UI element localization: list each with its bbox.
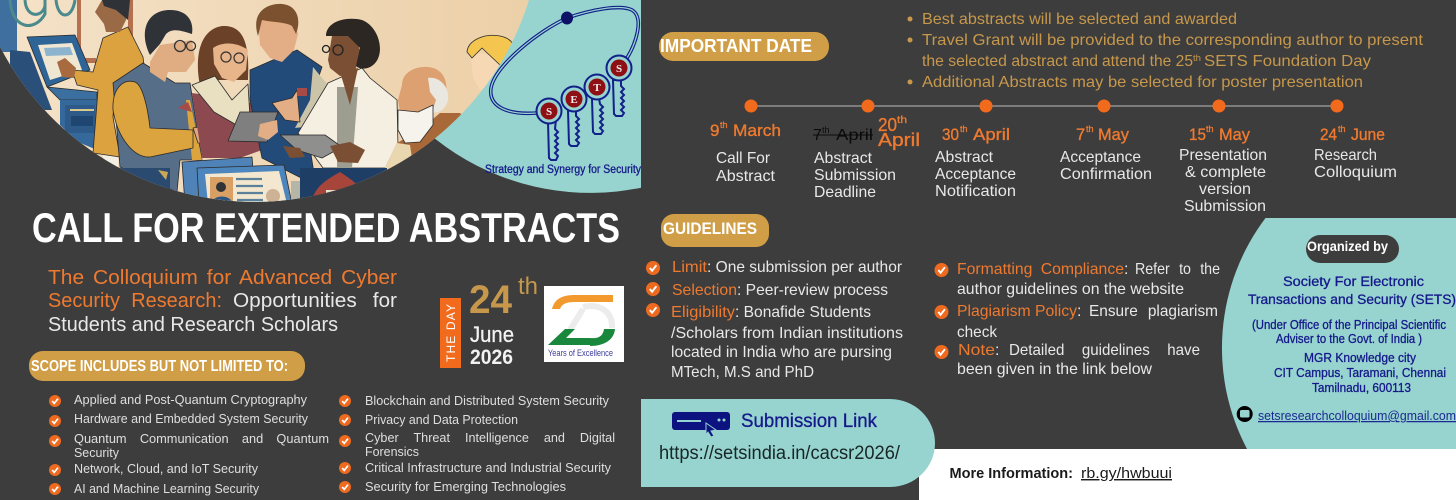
- milestone: revised deadline 20th April: Deadline: [814, 184, 876, 201]
- milestone: revised deadline 20th April: April: [836, 127, 873, 144]
- guidelines: left column: located in India who are pursing: [671, 344, 892, 361]
- guidelines: left column: [646, 259, 903, 381]
- award notes: th: [1193, 53, 1201, 63]
- milestone: 15th May: th: [1206, 124, 1214, 134]
- illustration: group of researchers: [0, 0, 530, 204]
- milestone: 15th May: & complete: [1185, 164, 1266, 181]
- event date block: June: [470, 322, 514, 347]
- more information line: More Information:: [950, 466, 1073, 482]
- milestone: revised deadline 20th April: Submission: [814, 167, 896, 184]
- scope list: left column: AI and Machine Learning Security: [74, 481, 259, 496]
- milestone: 15th May: Submission: [1184, 198, 1266, 215]
- organizer address: CIT Campus, Taramani, Chennai: [1274, 366, 1446, 380]
- timeline: [744, 100, 1344, 112]
- email address: setsresearchcolloquium@gmail.com: [1258, 409, 1456, 423]
- milestone: 30th April: [935, 124, 1016, 200]
- milestone: 24th June: June: [1351, 126, 1385, 144]
- guidelines: left column: /Scholars from Indian institutions: [671, 325, 903, 342]
- milestone: 15th May: version: [1199, 181, 1251, 198]
- guidelines pill: [661, 214, 769, 247]
- scope list: right column: [339, 393, 615, 494]
- scope list: right column: Blockchain and Distributed System Security: [365, 393, 609, 408]
- award notes: Additional Abstracts may be selected for poster presentation: [922, 74, 1363, 91]
- milestone: 30th April: Notification: [935, 183, 1016, 200]
- submission url: https://setsindia.in/cacsr2026/: [659, 443, 901, 464]
- award notes: SETS Foundation Day: [1204, 53, 1371, 70]
- milestone: 30th April: Abstract: [935, 149, 994, 166]
- scope list: right column: Critical Infrastructure and Industrial Security: [365, 460, 611, 475]
- guidelines: right column: Ensure plagiarism: [1089, 303, 1218, 320]
- organizer address: Tamilnadu, 600113: [1312, 381, 1411, 395]
- award notes: the selected abstract and: [922, 53, 1098, 70]
- woman in white coat: [280, 19, 398, 168]
- organizer name: [1248, 274, 1456, 307]
- guidelines: left column: Eligibility: [671, 304, 735, 321]
- milestone: 9th March: Abstract: [716, 168, 776, 185]
- scope list: left column: Security: [74, 445, 119, 460]
- milestone: 15th May: May: [1219, 126, 1251, 144]
- scope list: left column: Hardware and Embedded System Security: [74, 411, 308, 426]
- man in yellow kurta: [57, 0, 145, 167]
- more information line: [950, 466, 1172, 482]
- logo: 25 years of excellence: Years of Excellence: [548, 348, 613, 359]
- milestone: 7th May: [1060, 124, 1152, 183]
- logo tagline: Strategy and Synergy for Security: [485, 164, 641, 176]
- milestone: 7th May: th: [1086, 124, 1094, 134]
- scope list: right column: Cyber Threat Intelligence and Digital: [365, 430, 615, 445]
- guidelines: right column: Plagiarism Policy: [957, 303, 1077, 320]
- award notes: Best abstracts will be selected and awarded: [922, 11, 1237, 28]
- milestone: revised deadline 20th April: April: [878, 130, 920, 150]
- milestone: revised deadline 20th April: [813, 115, 920, 201]
- milestone: revised deadline 20th April: Abstract: [814, 150, 873, 167]
- submission link heading: Submission Link: [741, 411, 877, 432]
- milestone: 7th May: May: [1098, 126, 1130, 144]
- icon: SETS key ring: E: [570, 94, 578, 106]
- milestone: 7th May: Acceptance: [1060, 149, 1141, 166]
- colloquium subtitle: Students and Research Scholars: [48, 313, 338, 336]
- man in slate vest with glasses: [112, 10, 202, 192]
- the day tag: THE DAY: [444, 304, 458, 362]
- milestone: 15th May: Presentation: [1179, 147, 1267, 164]
- guidelines: left column: : Peer-review process: [737, 282, 888, 299]
- organizer affiliation: Adviser to the Govt. of India ): [1276, 332, 1422, 346]
- guidelines: right column: :: [1077, 303, 1081, 320]
- title: CALL FOR EXTENDED ABSTRACTS: [32, 204, 620, 251]
- important date pill: IMPORTANT DATE: [660, 36, 812, 56]
- man in navy vest: [250, 4, 332, 185]
- bottom monitors and passport: [120, 157, 387, 204]
- icon: email: [1237, 406, 1253, 422]
- organizer address: MGR Knowledge city: [1304, 351, 1417, 365]
- guidelines: right column: check: [957, 324, 998, 341]
- milestone: 9th March: th: [720, 120, 728, 130]
- scope list: left column: Network, Cloud, and IoT Security: [74, 461, 258, 476]
- organizer address: [1274, 351, 1446, 395]
- guidelines pill: GUIDELINES: [663, 220, 757, 238]
- milestone: 15th May: [1179, 124, 1267, 215]
- scope list: left column: Quantum Communication and Quantum: [74, 431, 329, 446]
- colloquium subtitle: Opportunities for: [233, 289, 397, 312]
- guidelines: right column: Note: [958, 342, 995, 359]
- scope heading pill: SCOPE INCLUDES BUT NOT LIMITED TO:: [31, 358, 288, 375]
- guidelines: left column: Limit: [672, 259, 708, 276]
- award notes: Travel Grant will be provided to the corresponding author to present: [922, 32, 1424, 49]
- milestone: 7th May: 7: [1076, 126, 1085, 144]
- milestone: 24th June: th: [1338, 124, 1346, 134]
- tablet held by first pair: [228, 112, 278, 142]
- colloquium subtitle: [48, 266, 397, 336]
- milestone: 30th April: April: [973, 126, 1010, 144]
- organizer name: Transactions and Security (SETS): [1248, 292, 1456, 307]
- milestone: 9th March: Call For: [716, 150, 771, 167]
- white footer band: [919, 449, 1456, 500]
- left machine and cables: [0, 0, 133, 150]
- guidelines: right column: Detailed guidelines have: [1009, 342, 1200, 359]
- guidelines: left column: : One submission per author: [707, 259, 903, 276]
- milestone: 24th June: [1314, 124, 1397, 181]
- organizer affiliation: [1252, 318, 1446, 346]
- milestone: revised deadline 20th April: th: [897, 115, 907, 126]
- guidelines: right column: :: [995, 342, 999, 359]
- elderly man with white beard: [383, 66, 462, 172]
- event date block: 2026: [470, 346, 513, 369]
- organized by pill: Organized by: [1307, 239, 1388, 254]
- panel: organizer: [1222, 218, 1456, 449]
- panel: submission link: [641, 399, 935, 487]
- milestone: 30th April: Acceptance: [935, 166, 1016, 183]
- guidelines: right column: author guidelines on the website: [957, 281, 1184, 298]
- guidelines: right column: Formatting Compliance: [957, 261, 1124, 278]
- guidelines: left column: : Bonafide Students: [735, 304, 871, 321]
- organizer name: Society For Electronic: [1283, 274, 1424, 289]
- event date block: [440, 273, 538, 369]
- guidelines: right column: [934, 261, 1220, 378]
- icon: address bar with cursor: [672, 412, 730, 437]
- organized by pill: [1306, 235, 1399, 263]
- woman with scarf: [192, 26, 262, 158]
- event date block: 24: [469, 278, 513, 322]
- milestone: 9th March: [710, 120, 781, 185]
- guidelines: left column: MTech, M.S and PhD: [671, 364, 814, 381]
- milestone: revised deadline 20th April: 7: [813, 127, 822, 144]
- scope list: right column: Security for Emerging Technologies: [365, 479, 566, 494]
- scope list: right column: Forensics: [365, 444, 419, 459]
- more information line: rb.gy/hwbuui: [1081, 466, 1172, 482]
- award notes: attend the 25: [1102, 53, 1193, 70]
- guidelines: left column: Selection: [672, 282, 737, 299]
- colloquium subtitle: Security Research:: [48, 289, 222, 312]
- scope list: left column: [49, 392, 329, 496]
- panel: SETS logo teal circle: [347, 0, 641, 193]
- important date pill: [659, 32, 829, 61]
- icon: SETS key ring: S: [546, 106, 552, 118]
- guidelines: right column: Refer to the: [1135, 261, 1220, 278]
- guidelines: right column: :: [1124, 261, 1128, 278]
- event date block: th: [518, 273, 538, 300]
- milestone: 7th May: Confirmation: [1060, 166, 1152, 183]
- icon: SETS key ring: [491, 8, 638, 160]
- milestone: 24th June: 24: [1320, 126, 1337, 144]
- milestone: 15th May: 15: [1189, 126, 1206, 144]
- guidelines: right column: been given in the link below: [957, 361, 1152, 378]
- scope list: right column: Privacy and Data Protection: [365, 412, 518, 427]
- milestone: 30th April: 30: [942, 126, 959, 144]
- milestone: 24th June: Research: [1314, 147, 1377, 164]
- milestone: 9th March: 9: [710, 121, 719, 140]
- milestone: 9th March: March: [733, 121, 781, 140]
- award notes: [908, 11, 1424, 91]
- milestone: 24th June: Colloquium: [1314, 164, 1397, 181]
- scope list: left column: Applied and Post-Quantum Cryptography: [74, 392, 307, 407]
- logo: 25 years of excellence: [544, 286, 624, 362]
- icon: SETS key ring: T: [593, 82, 601, 94]
- colloquium subtitle: The Colloquium for Advanced Cyber: [48, 266, 397, 289]
- milestone: 30th April: th: [960, 124, 968, 134]
- scope heading pill: [29, 351, 305, 381]
- milestone: revised deadline 20th April: 20: [878, 115, 897, 135]
- milestone: revised deadline 20th April: th: [822, 125, 830, 135]
- blonde woman: [467, 35, 514, 90]
- icon: SETS key ring: S: [616, 63, 622, 75]
